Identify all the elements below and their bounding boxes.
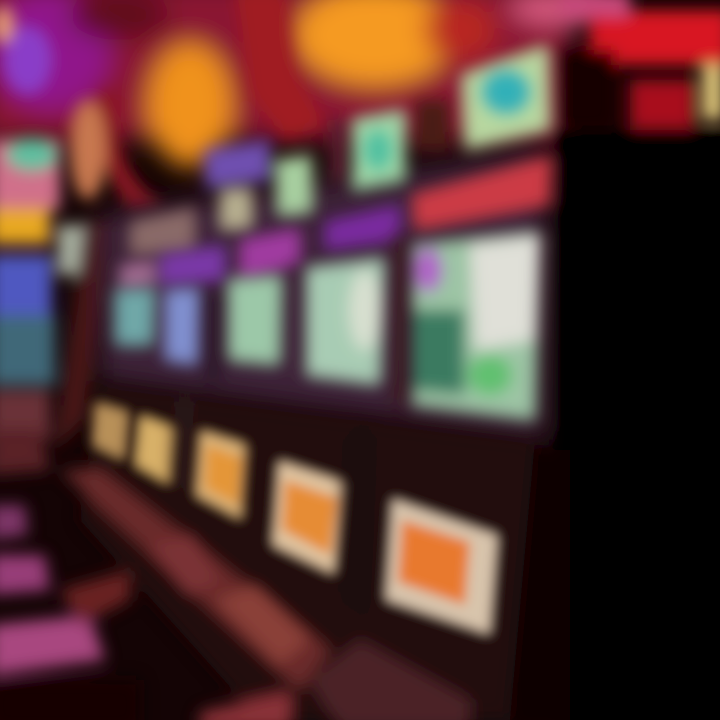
machine body band bbox=[100, 150, 545, 440]
deck highlights bbox=[150, 400, 375, 665]
right dark panel bbox=[510, 130, 720, 720]
bottom-left pink stools bbox=[0, 430, 140, 720]
left side colours bbox=[0, 139, 115, 450]
marquee band bbox=[120, 155, 552, 290]
screens bbox=[115, 232, 540, 420]
ceiling lights bbox=[0, 0, 610, 210]
payout panels bbox=[92, 402, 498, 635]
top display panels bbox=[130, 45, 550, 255]
top right red lights bbox=[560, 0, 720, 130]
teal screen centre bbox=[364, 70, 530, 170]
lower dark base bbox=[60, 385, 535, 720]
machine dividers bbox=[205, 100, 450, 405]
